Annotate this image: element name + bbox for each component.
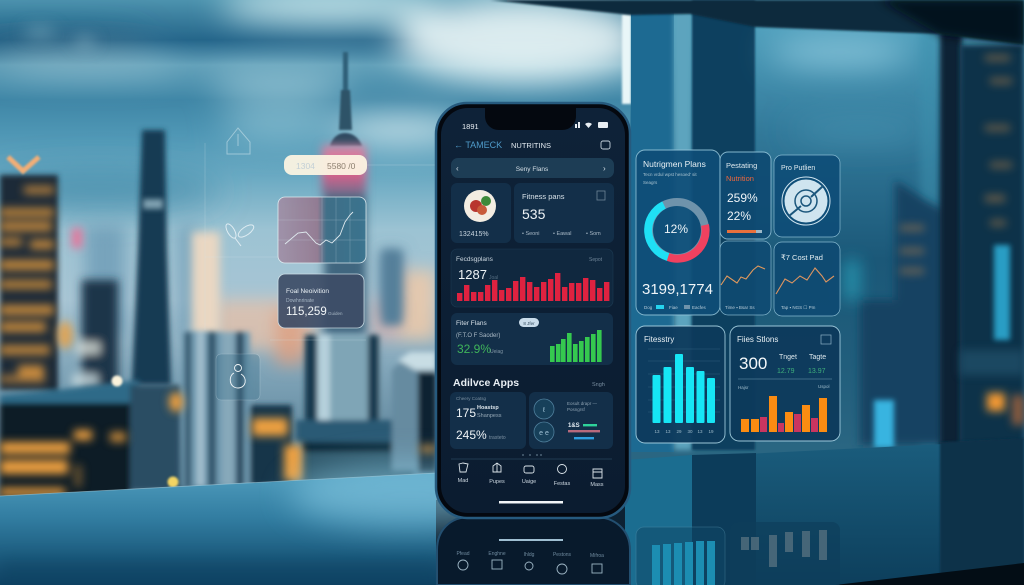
panel: orange bar chart: Uspol — [818, 384, 830, 389]
section heading: Adilvce Apps — [453, 377, 519, 389]
panel: nutrition plans donut — [636, 150, 720, 315]
panel: fitness cyan bar chart: Fitesstry — [644, 335, 674, 344]
panel: nutrition plans donut: Eacfes — [692, 305, 707, 310]
panel: fitness cyan bar chart: 13 — [697, 429, 703, 434]
panel: orange bar chart: 13.97 — [808, 368, 826, 375]
panel: orange bar chart: Fiies Stlons — [737, 335, 778, 344]
icon: orange chevron — [8, 157, 39, 171]
panel: nutrition plans donut: Fiae — [669, 305, 678, 310]
panel: line chart small — [720, 241, 771, 315]
panel: orange bar chart: 300 — [739, 354, 767, 373]
panel: fitness cyan bar chart: 29 — [676, 429, 682, 434]
search bar — [451, 158, 614, 178]
panel: nutrition percentages: Pestating — [726, 161, 757, 170]
card: red bar chart: Fecdsgplans — [456, 256, 494, 263]
phone reflection — [437, 517, 630, 585]
card: fitness plans — [514, 183, 614, 243]
notch — [485, 108, 576, 130]
panel: cost line chart — [774, 242, 840, 316]
glass table surface — [0, 438, 1024, 585]
card: app stats: 245% — [456, 428, 487, 442]
status bar — [462, 122, 608, 131]
panel reflections on table — [636, 522, 840, 585]
panel: nutrition plans donut: Tecn vrdul wpst hesoed' sit — [643, 172, 697, 177]
card: fitness plans: Fitness pans — [522, 192, 565, 201]
card: green bar chart: 8 Jfer — [523, 321, 535, 326]
panel: glass line chart — [278, 197, 366, 263]
card: green bar chart: Fiter Flans — [456, 320, 487, 327]
callout pill — [284, 155, 367, 175]
icon: faint house outline — [227, 128, 250, 154]
card: app stats: Cheery Coatsg — [456, 396, 487, 401]
bottom navigation: Uaige — [522, 479, 536, 485]
panel: meal statistic card: Dowhnrinate — [286, 298, 314, 304]
panel: orange bar chart: Tagte — [809, 354, 826, 361]
phone reflection: Pfead — [456, 551, 470, 557]
app header: ← TAMECK — [454, 140, 502, 150]
app header — [454, 140, 610, 150]
panel: nutrition plans donut: 3199,1774 — [642, 281, 713, 298]
background: window frame and right towers — [490, 0, 1024, 460]
card: app stats: 175 — [456, 406, 476, 420]
card: meal — [451, 183, 511, 243]
phone reflection: Enghne — [488, 551, 506, 557]
panel: meal statistic card — [278, 274, 364, 328]
card: meal: 132415% — [459, 231, 489, 238]
panel: nutrition plans donut: Dog — [644, 305, 653, 310]
background: blurred city buildings — [0, 52, 436, 498]
card: green bar chart: 32.9% — [457, 342, 491, 356]
home indicator — [499, 501, 563, 504]
card: fitness plans: • Som — [586, 231, 601, 237]
panel: fitness cyan bar chart: 19 — [708, 429, 714, 434]
icon: person in glass square — [216, 354, 260, 400]
callout pill: 5580 /0 — [327, 161, 356, 171]
panel: nutrition plans donut: Seagrs — [643, 180, 658, 185]
bottom navigation: Pupes — [489, 479, 505, 485]
phone reflection: Ihldg — [524, 552, 535, 558]
card: app progress: ℓ — [542, 407, 546, 414]
search bar: › — [603, 164, 606, 173]
card: app progress: Eosult drapr — — [567, 401, 598, 406]
card: green bar chart — [451, 313, 613, 365]
card: red bar chart: Joal — [489, 275, 498, 281]
card: app stats — [450, 392, 526, 449]
callout pill: 1304 — [296, 161, 315, 171]
panel: fitness cyan bar chart: 30 — [687, 429, 693, 434]
card: fitness plans: 535 — [522, 206, 546, 222]
phone reflection: Pestons — [553, 552, 572, 558]
panel: meal statistic card: 115,259 — [286, 306, 327, 318]
card: app progress: 1&S — [568, 423, 580, 429]
icon: faint tools outline — [224, 222, 256, 246]
search bar: ‹ — [456, 164, 459, 173]
app header: NUTRITINS — [511, 141, 551, 150]
phone reflection: Mifroa — [590, 553, 604, 559]
panel: cost line chart: Tap ▪ NGS ☐ Pm — [781, 305, 816, 310]
panel: nutrition percentages: 259% — [727, 191, 758, 205]
panel: fitness cyan bar chart: 13 — [665, 429, 671, 434]
card: green bar chart: (F.T.O F Saoder) — [456, 333, 500, 339]
panel: orange bar chart: Tnget — [779, 354, 797, 361]
panel: meal statistic card: Guiden — [328, 311, 343, 316]
panel: nutrition plans donut: Nutrigmen Plans — [643, 159, 706, 169]
card: app progress: e e — [539, 430, 549, 437]
panel: orange bar chart: Hajsr — [738, 385, 749, 390]
panel: fitness cyan bar chart — [636, 326, 725, 443]
card: fitness plans: • Eawal — [553, 231, 571, 237]
phone screen — [441, 108, 625, 513]
pagination dots — [522, 454, 542, 456]
status bar: 1891 — [462, 122, 479, 131]
section heading: Sngh — [592, 382, 605, 388]
card: green bar chart: Ueiag — [490, 349, 503, 355]
panel: line chart small: Time ▪ Bsar Ss — [725, 305, 755, 310]
panel: fitness cyan bar chart: 13 — [654, 429, 660, 434]
card: fitness plans: • Seoni — [522, 231, 540, 237]
card: app stats: Hoastsp — [477, 405, 499, 411]
card: app progress: Posngrsf — [567, 407, 586, 412]
panel: nutrition plans donut: 12% — [664, 222, 688, 236]
card: app progress — [529, 392, 613, 449]
card: red bar chart — [451, 249, 613, 307]
panel: orange bar chart — [730, 326, 840, 441]
search bar: Seny Flans — [516, 166, 549, 173]
panel: target icon — [774, 155, 840, 237]
background: blurred sky and clouds — [0, 0, 645, 500]
bottom navigation: Festas — [554, 481, 570, 487]
card: red bar chart: Sepot — [589, 257, 603, 263]
panel: cost line chart: ₹7 Cost Pad — [781, 253, 823, 262]
phone — [436, 103, 630, 518]
bottom navigation — [451, 459, 612, 488]
section heading — [453, 377, 605, 389]
bottom navigation: Mass — [590, 482, 604, 488]
panel: nutrition percentages: Nutrition — [726, 174, 754, 183]
card: app stats: Shanpess — [477, 413, 502, 419]
panel: orange bar chart: 12.79 — [777, 368, 795, 375]
panel: nutrition percentages — [720, 152, 771, 239]
faint connector lines — [205, 143, 436, 340]
bottom navigation: Mad — [458, 478, 468, 484]
card: red bar chart: 1287 — [458, 267, 487, 282]
panel: meal statistic card: Foal Neoivition — [286, 288, 329, 295]
phone body — [436, 103, 630, 518]
panel: target icon: Pro Putlien — [781, 165, 815, 172]
card: app stats: trasteto — [489, 435, 506, 441]
panel: nutrition percentages: 22% — [727, 209, 751, 223]
